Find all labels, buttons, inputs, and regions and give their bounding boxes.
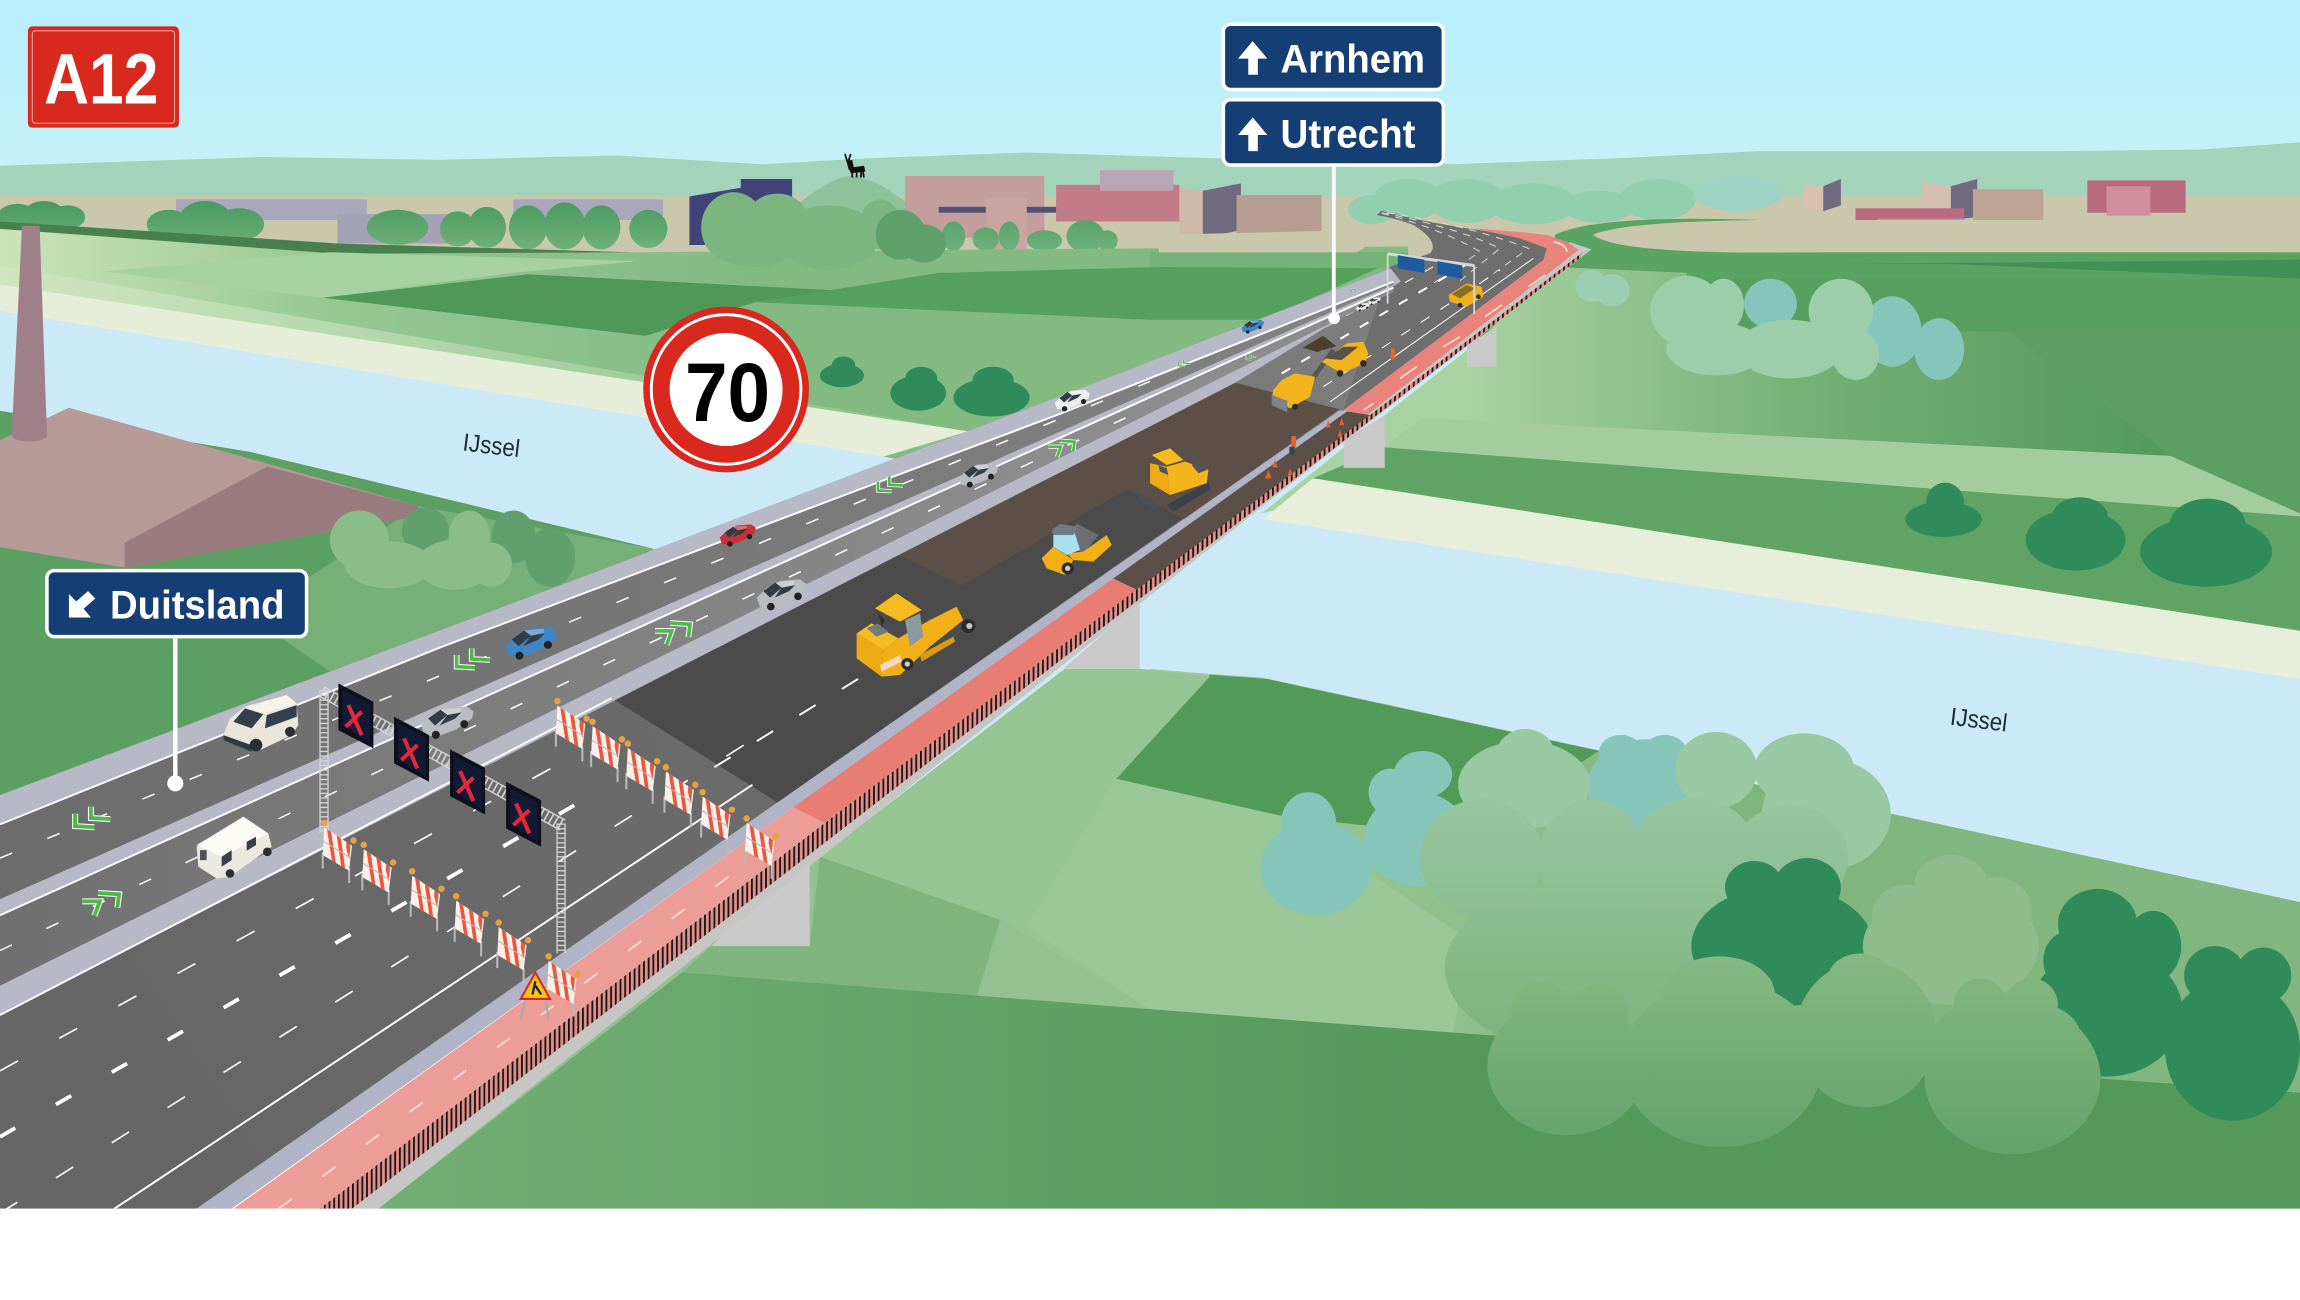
factory [0, 226, 418, 568]
road barriers front row [321, 820, 581, 1017]
far direction gantry [1388, 254, 1474, 314]
upper carriageway [0, 282, 1393, 899]
road number sign A12 [28, 26, 179, 128]
road number sign A12: A12 [44, 39, 158, 119]
far tree line near road bend [1348, 176, 1782, 224]
far truck [1448, 283, 1483, 307]
new asphalt [612, 383, 1339, 802]
bridge deck side [320, 242, 1592, 1209]
white footer band [0, 1209, 2300, 1300]
speed limit sign 70 [643, 307, 809, 472]
speed limit sign 70: 70 [685, 345, 770, 439]
buildings right [1804, 179, 2186, 248]
vehicle: red car [720, 524, 756, 547]
road barriers rear row [554, 698, 779, 879]
far fields left [0, 221, 1408, 792]
vehicle: blue van [505, 627, 557, 660]
sky [0, 0, 2300, 205]
vehicle: white cars distant [1356, 297, 1381, 311]
bushes right far [1575, 270, 1964, 380]
land below river right [378, 669, 2300, 1209]
noise barrier [320, 252, 1583, 1209]
dump truck [1322, 342, 1368, 377]
bushes near factory [330, 508, 575, 590]
median and shoulder bands [0, 268, 1401, 1015]
tree row far left [0, 201, 1118, 252]
direction sign Duitsland with pointer: Duitsland [110, 583, 285, 627]
overhead gantry with red cross signals [319, 683, 565, 953]
vehicle: white car far [1055, 390, 1090, 411]
middle carriageway [0, 288, 1393, 986]
road workers and cones [1265, 348, 1395, 478]
front tree cluster [1260, 729, 2300, 1154]
bushes cluster behind road [701, 192, 946, 270]
vehicle: silver car [757, 579, 807, 610]
crawler paver [1138, 448, 1211, 512]
warning sign road works [521, 973, 550, 1019]
direction signs Arnhem and Utrecht with pointer: Utrecht [1281, 112, 1415, 156]
vehicle: silver car far [959, 463, 998, 488]
dirt pile on truck [1303, 336, 1336, 352]
far ground [0, 195, 2300, 283]
river label left: IJssel [461, 428, 522, 463]
buildings centre [905, 170, 1322, 251]
vehicle: white van [223, 695, 298, 752]
hill with deer [763, 154, 939, 235]
milling machine with conveyor [1272, 350, 1333, 412]
levee and river right [1085, 478, 2300, 902]
road roller [1042, 523, 1112, 575]
road markings [0, 282, 1393, 1213]
river label right: IJssel [1949, 703, 2009, 738]
paving machine [857, 593, 975, 677]
vehicle: silver car under gantry [421, 706, 474, 739]
vehicle: camper [197, 817, 272, 878]
cycle path pink [232, 228, 1578, 1209]
brown strip beside barrier [1106, 411, 1370, 590]
far fields right [1261, 219, 2300, 645]
direction signs Arnhem and Utrecht with pointer [1223, 24, 1443, 324]
bushes behind levee dark [820, 356, 1030, 417]
road base [0, 260, 1543, 1209]
direction signs Arnhem and Utrecht with pointer: Arnhem [1281, 38, 1425, 82]
land left below river [0, 411, 653, 821]
bushes right mid dark [1905, 483, 2272, 587]
far road curve [1267, 211, 1552, 410]
buildings left [176, 179, 792, 245]
vehicle: blue car far [1241, 320, 1264, 334]
piers [711, 327, 1496, 946]
levee and river left [0, 265, 1144, 675]
distant hills [0, 142, 2300, 205]
right curb [197, 411, 1348, 1209]
lane chevrons [75, 289, 1356, 916]
direction sign Duitsland with pointer [47, 571, 307, 791]
water under bridge [0, 279, 2300, 1217]
milled road section [895, 383, 1339, 585]
